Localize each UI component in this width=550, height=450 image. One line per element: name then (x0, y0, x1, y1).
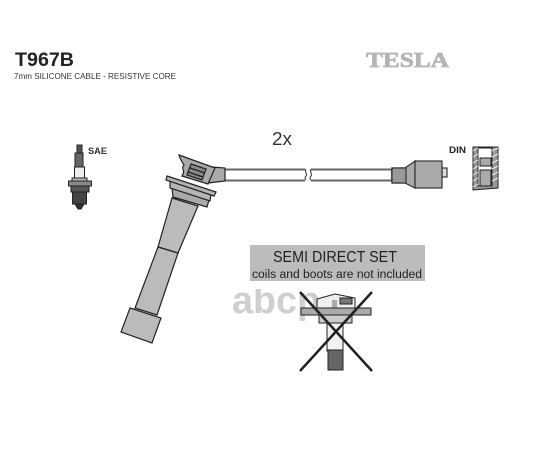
boot head connector (208, 167, 225, 183)
icon: DIN terminal cross-section (473, 147, 498, 190)
boot neck (172, 188, 209, 207)
infographic canvas (14, 52, 498, 372)
watermark: abcp (232, 280, 320, 322)
title: part number: T967B (15, 50, 74, 71)
boot upper tube (158, 198, 198, 253)
subtitle: cable description: 7mm SILICONE CABLE - RESISTIVE CORE (14, 71, 176, 81)
brand logo: TESLA: TESLA (366, 48, 450, 72)
label: SAE: SAE (88, 146, 107, 156)
boot head ribs (187, 164, 206, 180)
right connector boot (392, 161, 447, 188)
quantity label: 2x (272, 129, 292, 149)
boot flange (166, 176, 216, 196)
cable with break mark (224, 167, 392, 183)
boot lower tube (135, 247, 178, 315)
label: DIN: DIN (449, 145, 466, 155)
boot head (179, 155, 215, 184)
coil drawing (301, 294, 371, 370)
cross out lines (300, 292, 372, 371)
notice box: semi direct set (250, 245, 425, 281)
boot collar (170, 181, 211, 201)
long angled boot (121, 155, 225, 343)
icon: crossed-out ignition coil (300, 292, 372, 371)
notice heading: SEMI DIRECT SET (273, 249, 397, 266)
boot end cap (121, 308, 161, 343)
notice text: coils and boots are not included (252, 269, 422, 281)
icon: spark plug (68, 145, 92, 209)
